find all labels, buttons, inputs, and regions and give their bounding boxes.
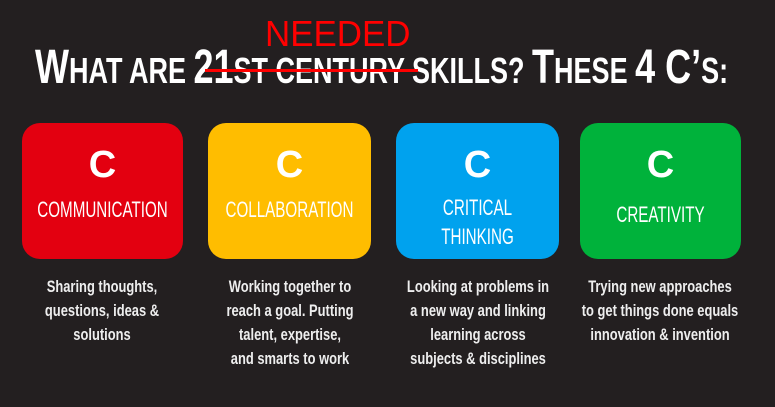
panel: critical thinking: THINKING bbox=[441, 224, 514, 249]
text: critical thinking: subjects & disciplines bbox=[410, 349, 546, 368]
panel: critical thinking: C bbox=[464, 144, 491, 186]
text: critical thinking: learning across bbox=[430, 325, 526, 344]
text: creativity: innovation & invention bbox=[590, 325, 730, 344]
text: communication: solutions bbox=[73, 325, 131, 344]
text: collaboration bbox=[226, 277, 354, 368]
text: critical thinking: Looking at problems in bbox=[407, 277, 549, 296]
panel: collaboration: COLLABORATION bbox=[226, 197, 353, 222]
panel: collaboration bbox=[208, 123, 371, 259]
text: collaboration: Working together to bbox=[229, 277, 351, 296]
panel: creativity: C bbox=[647, 144, 674, 186]
text: communication bbox=[45, 277, 159, 344]
text: critical thinking bbox=[407, 277, 549, 368]
panel: creativity bbox=[580, 123, 741, 259]
text: critical thinking: a new way and linking bbox=[410, 301, 546, 320]
text: creativity: Trying new approaches bbox=[588, 277, 732, 296]
panel: collaboration: C bbox=[276, 144, 303, 186]
text: communication: Sharing thoughts, bbox=[47, 277, 157, 296]
panel: critical thinking: CRITICAL bbox=[443, 195, 512, 220]
text: collaboration: and smarts to work bbox=[231, 349, 349, 368]
text: communication: questions, ideas & bbox=[45, 301, 159, 320]
title text: WHAT ARE 21ST CENTURY SKILLS? THESE 4 C’S: bbox=[35, 41, 728, 94]
panel: creativity: CREATIVITY bbox=[616, 202, 705, 227]
text: creativity bbox=[582, 277, 738, 344]
text: creativity: to get things done equals bbox=[582, 301, 738, 320]
panel: communication: C bbox=[89, 144, 116, 186]
text: collaboration: reach a goal. Putting bbox=[226, 301, 354, 320]
correction: NEEDED: NEEDED bbox=[265, 13, 411, 54]
text: collaboration: talent, expertise, bbox=[239, 325, 341, 344]
strike line bbox=[205, 69, 418, 72]
panel: communication: COMMUNICATION bbox=[37, 197, 168, 222]
panel: communication bbox=[22, 123, 183, 259]
panel: critical thinking bbox=[396, 123, 559, 259]
